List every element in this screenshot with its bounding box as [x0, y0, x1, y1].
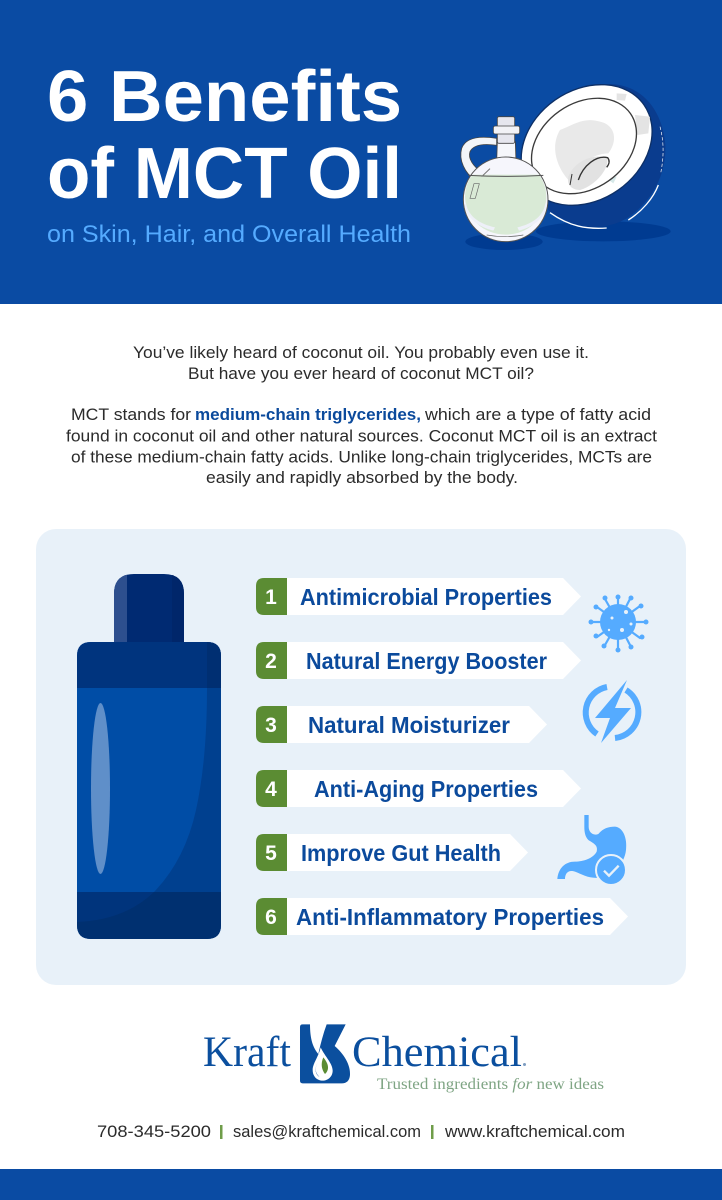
benefit 4: 4 [265, 778, 277, 801]
intro text: easily and rapidly absorbed by the body. [206, 469, 518, 487]
benefit 2: 2 [265, 650, 277, 673]
coconut shell [522, 84, 665, 228]
logo: Kraft Chemical [203, 1024, 604, 1093]
benefit 5 [256, 834, 528, 871]
intro text: found in coconut oil and other natural sources. Coconut MCT oil is an extract [66, 428, 657, 446]
logo: Kraft Chemical: Chemical [352, 1029, 522, 1076]
benefit 4: Anti-Aging Properties [314, 776, 538, 802]
intro text [66, 344, 657, 487]
jar handle [461, 137, 497, 180]
benefit 1: 1 [265, 586, 277, 609]
title: 6 Benefits [47, 57, 402, 137]
contact details: sales@kraftchemical.com [233, 1123, 421, 1141]
contact details: www.kraftchemical.com [444, 1123, 625, 1141]
benefit 1: Antimicrobial Properties [300, 584, 552, 610]
cavity grey shading [555, 120, 614, 180]
jar cork [493, 117, 520, 143]
intro text: MCT stands for [71, 406, 192, 424]
coconut inner cavity [513, 79, 655, 213]
coconut flesh rim [520, 84, 653, 206]
benefit 3: Natural Moisturizer [308, 712, 510, 738]
intro text: of these medium-chain fatty acids. Unlike long-chain triglycerides, MCTs are [71, 448, 652, 466]
intro text: But have you ever heard of coconut MCT oil? [188, 365, 534, 383]
intro text: which are a type of fatty acid [424, 406, 651, 424]
bottle cap [114, 574, 184, 642]
jar neck [497, 142, 516, 162]
icon: stomach [557, 815, 626, 885]
benefit 5: 5 [265, 842, 277, 865]
benefit 6 [256, 898, 628, 935]
footer band [0, 1169, 722, 1200]
jar body with oil [460, 157, 553, 242]
shadow under jar [465, 233, 543, 250]
benefit 6: 6 [265, 906, 277, 929]
benefit 3 [256, 706, 547, 743]
contact details [97, 1123, 625, 1141]
contact details: 708-345-5200 [97, 1123, 211, 1141]
benefit 4 [256, 770, 581, 807]
logo wordmark: Kraft [203, 1029, 291, 1076]
title [47, 57, 402, 214]
bottle body [77, 642, 221, 939]
logo mark [300, 1024, 350, 1083]
benefit 6: Anti-Inflammatory Properties [296, 904, 604, 930]
logo tagline: Trusted ingredients for new ideas [377, 1076, 604, 1093]
panel: benefits [36, 529, 686, 985]
title: of MCT Oil [47, 134, 402, 214]
header band [0, 0, 722, 304]
bottle highlight [91, 703, 110, 874]
intro text: medium-chain triglycerides, [195, 406, 421, 424]
icon: virus [588, 594, 648, 652]
intro text: You’ve likely heard of coconut oil. You probably even use it. [133, 344, 589, 362]
benefit 1 [256, 578, 581, 615]
shadow under coconut [536, 221, 671, 241]
bottle illustration [77, 574, 221, 939]
benefit 3: 3 [265, 714, 277, 737]
benefit 2 [256, 642, 581, 679]
icon: lightning bolt [586, 680, 638, 743]
illustration: coconut and oil jar [460, 84, 670, 250]
benefit 5: Improve Gut Health [301, 840, 501, 866]
benefit 2: Natural Energy Booster [306, 648, 547, 674]
subtitle: on Skin, Hair, and Overall Health [47, 221, 411, 248]
